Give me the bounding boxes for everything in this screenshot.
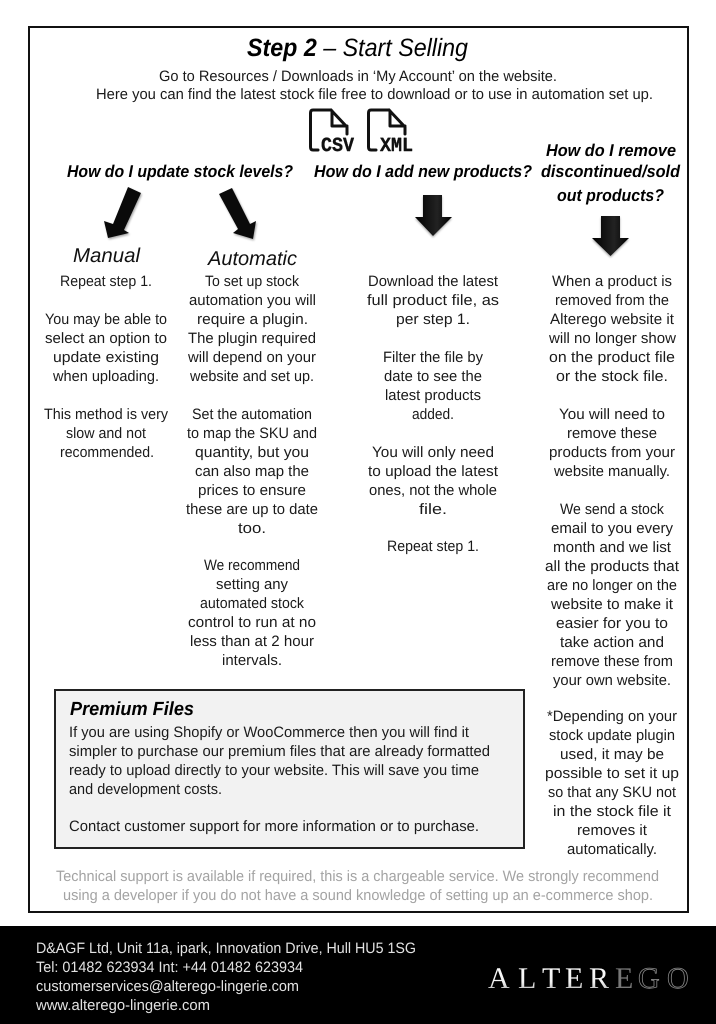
column text: manual xyxy=(44,273,168,461)
column text: new products: You will only need xyxy=(372,444,494,461)
column text: remove products: all the products that xyxy=(545,558,680,575)
heading: update stock levels: How do I update stock levels? xyxy=(67,162,294,181)
column text: automatic: prices to ensure xyxy=(198,482,306,499)
column text: automatic: The plugin required xyxy=(188,330,316,347)
icon: XML file: XML xyxy=(380,135,413,158)
column text: remove products: automatically. xyxy=(567,841,657,858)
column text: remove products: We send a stock xyxy=(560,501,664,518)
column text: automatic: can also map the xyxy=(195,463,309,480)
column text: remove products: remove these from xyxy=(551,653,673,670)
technical support note xyxy=(56,868,659,904)
column text: manual: This method is very xyxy=(44,406,168,423)
column text: new products: Filter the file by xyxy=(383,349,483,366)
column text: remove products: or the stock file. xyxy=(556,368,668,385)
panel: premium files xyxy=(55,690,524,848)
premium body text: simpler to purchase our premium files that are already formatted xyxy=(69,743,490,760)
logo: Alter Ego: A xyxy=(488,962,510,995)
column text: manual: when uploading. xyxy=(52,368,159,385)
column text: automatic: automated stock xyxy=(200,595,304,612)
arrow: to automatic xyxy=(219,188,257,240)
logo: Alter Ego: E xyxy=(565,962,583,995)
column text: new products: latest products xyxy=(385,387,481,404)
intro text: Here you can find the latest stock file free to download or to use in automation set up. xyxy=(96,86,653,103)
column text: remove products: possible to set it up xyxy=(545,765,679,782)
column text: remove products: take action and xyxy=(560,634,664,651)
footer contact details: Tel: 01482 623934 Int: +44 01482 623934 xyxy=(36,959,303,976)
heading: remove products xyxy=(541,141,681,205)
column text: automatic: less than at 2 hour xyxy=(190,633,314,650)
column text: remove products: website manually. xyxy=(553,463,670,480)
column text: new products: per step 1. xyxy=(396,311,470,328)
column text: remove products: Alterego website it xyxy=(550,311,675,328)
column text: manual: update existing xyxy=(53,349,159,366)
column text: automatic: automation you will xyxy=(189,292,316,309)
column text: new products: to upload the latest xyxy=(368,463,499,480)
column text: new products: Repeat step 1. xyxy=(387,538,479,555)
subheading: manual: Manual xyxy=(73,245,141,267)
arrow: to manual xyxy=(104,187,142,240)
column text: remove products xyxy=(545,273,680,858)
column text: remove products: stock update plugin xyxy=(549,727,675,744)
column text: automatic: require a plugin. xyxy=(197,311,308,328)
column text: automatic: To set up stock xyxy=(205,273,299,290)
technical support note: Technical support is available if required, this is a chargeable service. We strongly recommend xyxy=(56,868,659,885)
column text: remove products: easier for you to xyxy=(556,615,668,632)
column text: automatic: quantity, but you xyxy=(195,444,309,461)
logo: Alter Ego: T xyxy=(542,962,560,995)
column text: new products: date to see the xyxy=(384,368,482,385)
column text: remove products: email to you every xyxy=(551,520,673,537)
column text: automatic: website and set up. xyxy=(189,368,314,385)
technical support note: using a developer if you do not have a sound knowledge of setting up an e-commerce shop. xyxy=(63,887,653,904)
column text: automatic: too. xyxy=(238,520,266,537)
intro text xyxy=(96,68,653,103)
column text: remove products: removed from the xyxy=(555,292,669,309)
premium heading: Premium Files xyxy=(70,699,194,720)
column text: remove products: You will need to xyxy=(559,406,665,423)
column text: manual: Repeat step 1. xyxy=(60,273,152,290)
column text: manual: slow and not xyxy=(66,425,147,442)
footer contact details xyxy=(35,940,416,1014)
logo: Alter Ego: G xyxy=(638,962,660,995)
column text: remove products: will no longer show xyxy=(548,330,676,347)
column text: remove products: are no longer on the xyxy=(547,577,677,594)
column text: remove products: removes it xyxy=(577,822,648,839)
subheading: automatic: Automatic xyxy=(207,248,297,270)
column text: remove products: your own website. xyxy=(553,672,671,689)
column text: automatic: will depend on your xyxy=(187,349,316,366)
column text: remove products: on the product file xyxy=(549,349,675,366)
column text: remove products: *Depending on your xyxy=(547,708,677,725)
column text: manual: recommended. xyxy=(60,444,154,461)
column text: automatic: these are up to date xyxy=(186,501,318,518)
icon: CSV file xyxy=(310,110,354,158)
heading: remove products: How do I remove xyxy=(546,141,676,160)
column text: remove products: so that any SKU not xyxy=(548,784,677,801)
column text: automatic: to map the SKU and xyxy=(187,425,317,442)
premium body text: If you are using Shopify or WooCommerce then you will find it xyxy=(69,724,470,741)
column text: automatic: We recommend xyxy=(204,557,300,574)
arrow: remove products xyxy=(592,216,629,258)
column text: manual: select an option to xyxy=(45,330,167,347)
column text: new products: file. xyxy=(419,501,447,518)
footer contact details: customerservices@alterego-lingerie.com xyxy=(36,978,299,995)
column text: automatic: setting any xyxy=(216,576,288,593)
column text: automatic xyxy=(186,273,318,669)
column text: remove products: products from your xyxy=(549,444,675,461)
logo: Alter Ego: R xyxy=(589,962,609,995)
heading: remove products: discontinued/sold xyxy=(541,162,681,181)
column text: automatic: Set the automation xyxy=(192,406,312,423)
title: Step 2 – Start Selling xyxy=(247,34,468,62)
heading: remove products: out products? xyxy=(557,186,665,205)
column text: remove products: month and we list xyxy=(553,539,672,556)
footer band xyxy=(0,926,716,1024)
column text: new products: full product file, as xyxy=(367,292,499,309)
column text: new products xyxy=(367,273,499,555)
column text: new products: added. xyxy=(412,406,454,423)
column text: remove products: website to make it xyxy=(550,596,674,613)
icon: XML file xyxy=(368,110,413,158)
logo: Alter Ego: O xyxy=(667,962,689,995)
column text: automatic: intervals. xyxy=(222,652,282,669)
logo: Alter Ego: L xyxy=(518,962,536,995)
logo: Alter Ego xyxy=(488,962,689,995)
premium body text: ready to upload directly to your website. This will save you time xyxy=(69,762,479,779)
logo: Alter Ego: E xyxy=(615,962,633,995)
column text: manual: You may be able to xyxy=(45,311,167,328)
premium body text xyxy=(69,724,490,835)
column text: automatic: control to run at no xyxy=(188,614,316,631)
heading: add new products: How do I add new products? xyxy=(314,162,533,181)
arrow: new products xyxy=(415,195,452,238)
column text: remove products: in the stock file it xyxy=(553,803,672,820)
page frame xyxy=(29,27,688,912)
column text: remove products: remove these xyxy=(567,425,657,442)
intro text: Go to Resources / Downloads in ‘My Account’ on the website. xyxy=(159,68,557,85)
icon: CSV file: CSV xyxy=(321,135,354,158)
column text: remove products: used, it may be xyxy=(560,746,664,763)
premium body text: and development costs. xyxy=(69,781,222,798)
premium body text: Contact customer support for more information or to purchase. xyxy=(69,818,479,835)
column text: new products: ones, not the whole xyxy=(369,482,497,499)
footer contact details: www.alterego-lingerie.com xyxy=(35,997,210,1014)
column text: remove products: When a product is xyxy=(552,273,672,290)
footer contact details: D&AGF Ltd, Unit 11a, ipark, Innovation Drive, Hull HU5 1SG xyxy=(36,940,416,957)
column text: new products: Download the latest xyxy=(368,273,499,290)
